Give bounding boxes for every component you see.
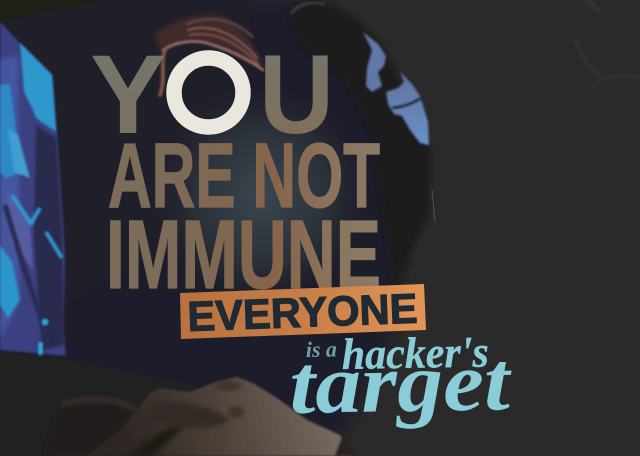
headline: ARE NOT: ARE NOT: [108, 125, 380, 227]
headline: YOU: [90, 32, 334, 157]
ring letter O: [174, 58, 243, 127]
desk: [0, 352, 350, 456]
hand on head: [155, 15, 264, 95]
headline: YOU: U: [259, 32, 334, 157]
headline: IMMUNE: IMMUNE: [106, 200, 381, 309]
monitor screen: [0, 22, 66, 356]
brow and nose: [363, 32, 386, 92]
tagline: is a hacker's: is a: [306, 336, 337, 362]
headline: YOU: Y: [90, 32, 166, 157]
tagline: is a hacker's: hacker's: [341, 327, 489, 379]
background figure shoulder: [575, 0, 640, 88]
hood silhouette: [290, 3, 430, 290]
banner: EVERYONE: EVERYONE: [187, 285, 418, 340]
front hand: [87, 377, 355, 456]
back hand: [45, 399, 138, 456]
tagline: target: target: [289, 335, 513, 432]
drawstring: [432, 190, 435, 222]
cheek and mouth area: [386, 72, 429, 145]
face in shadow: [363, 32, 429, 145]
